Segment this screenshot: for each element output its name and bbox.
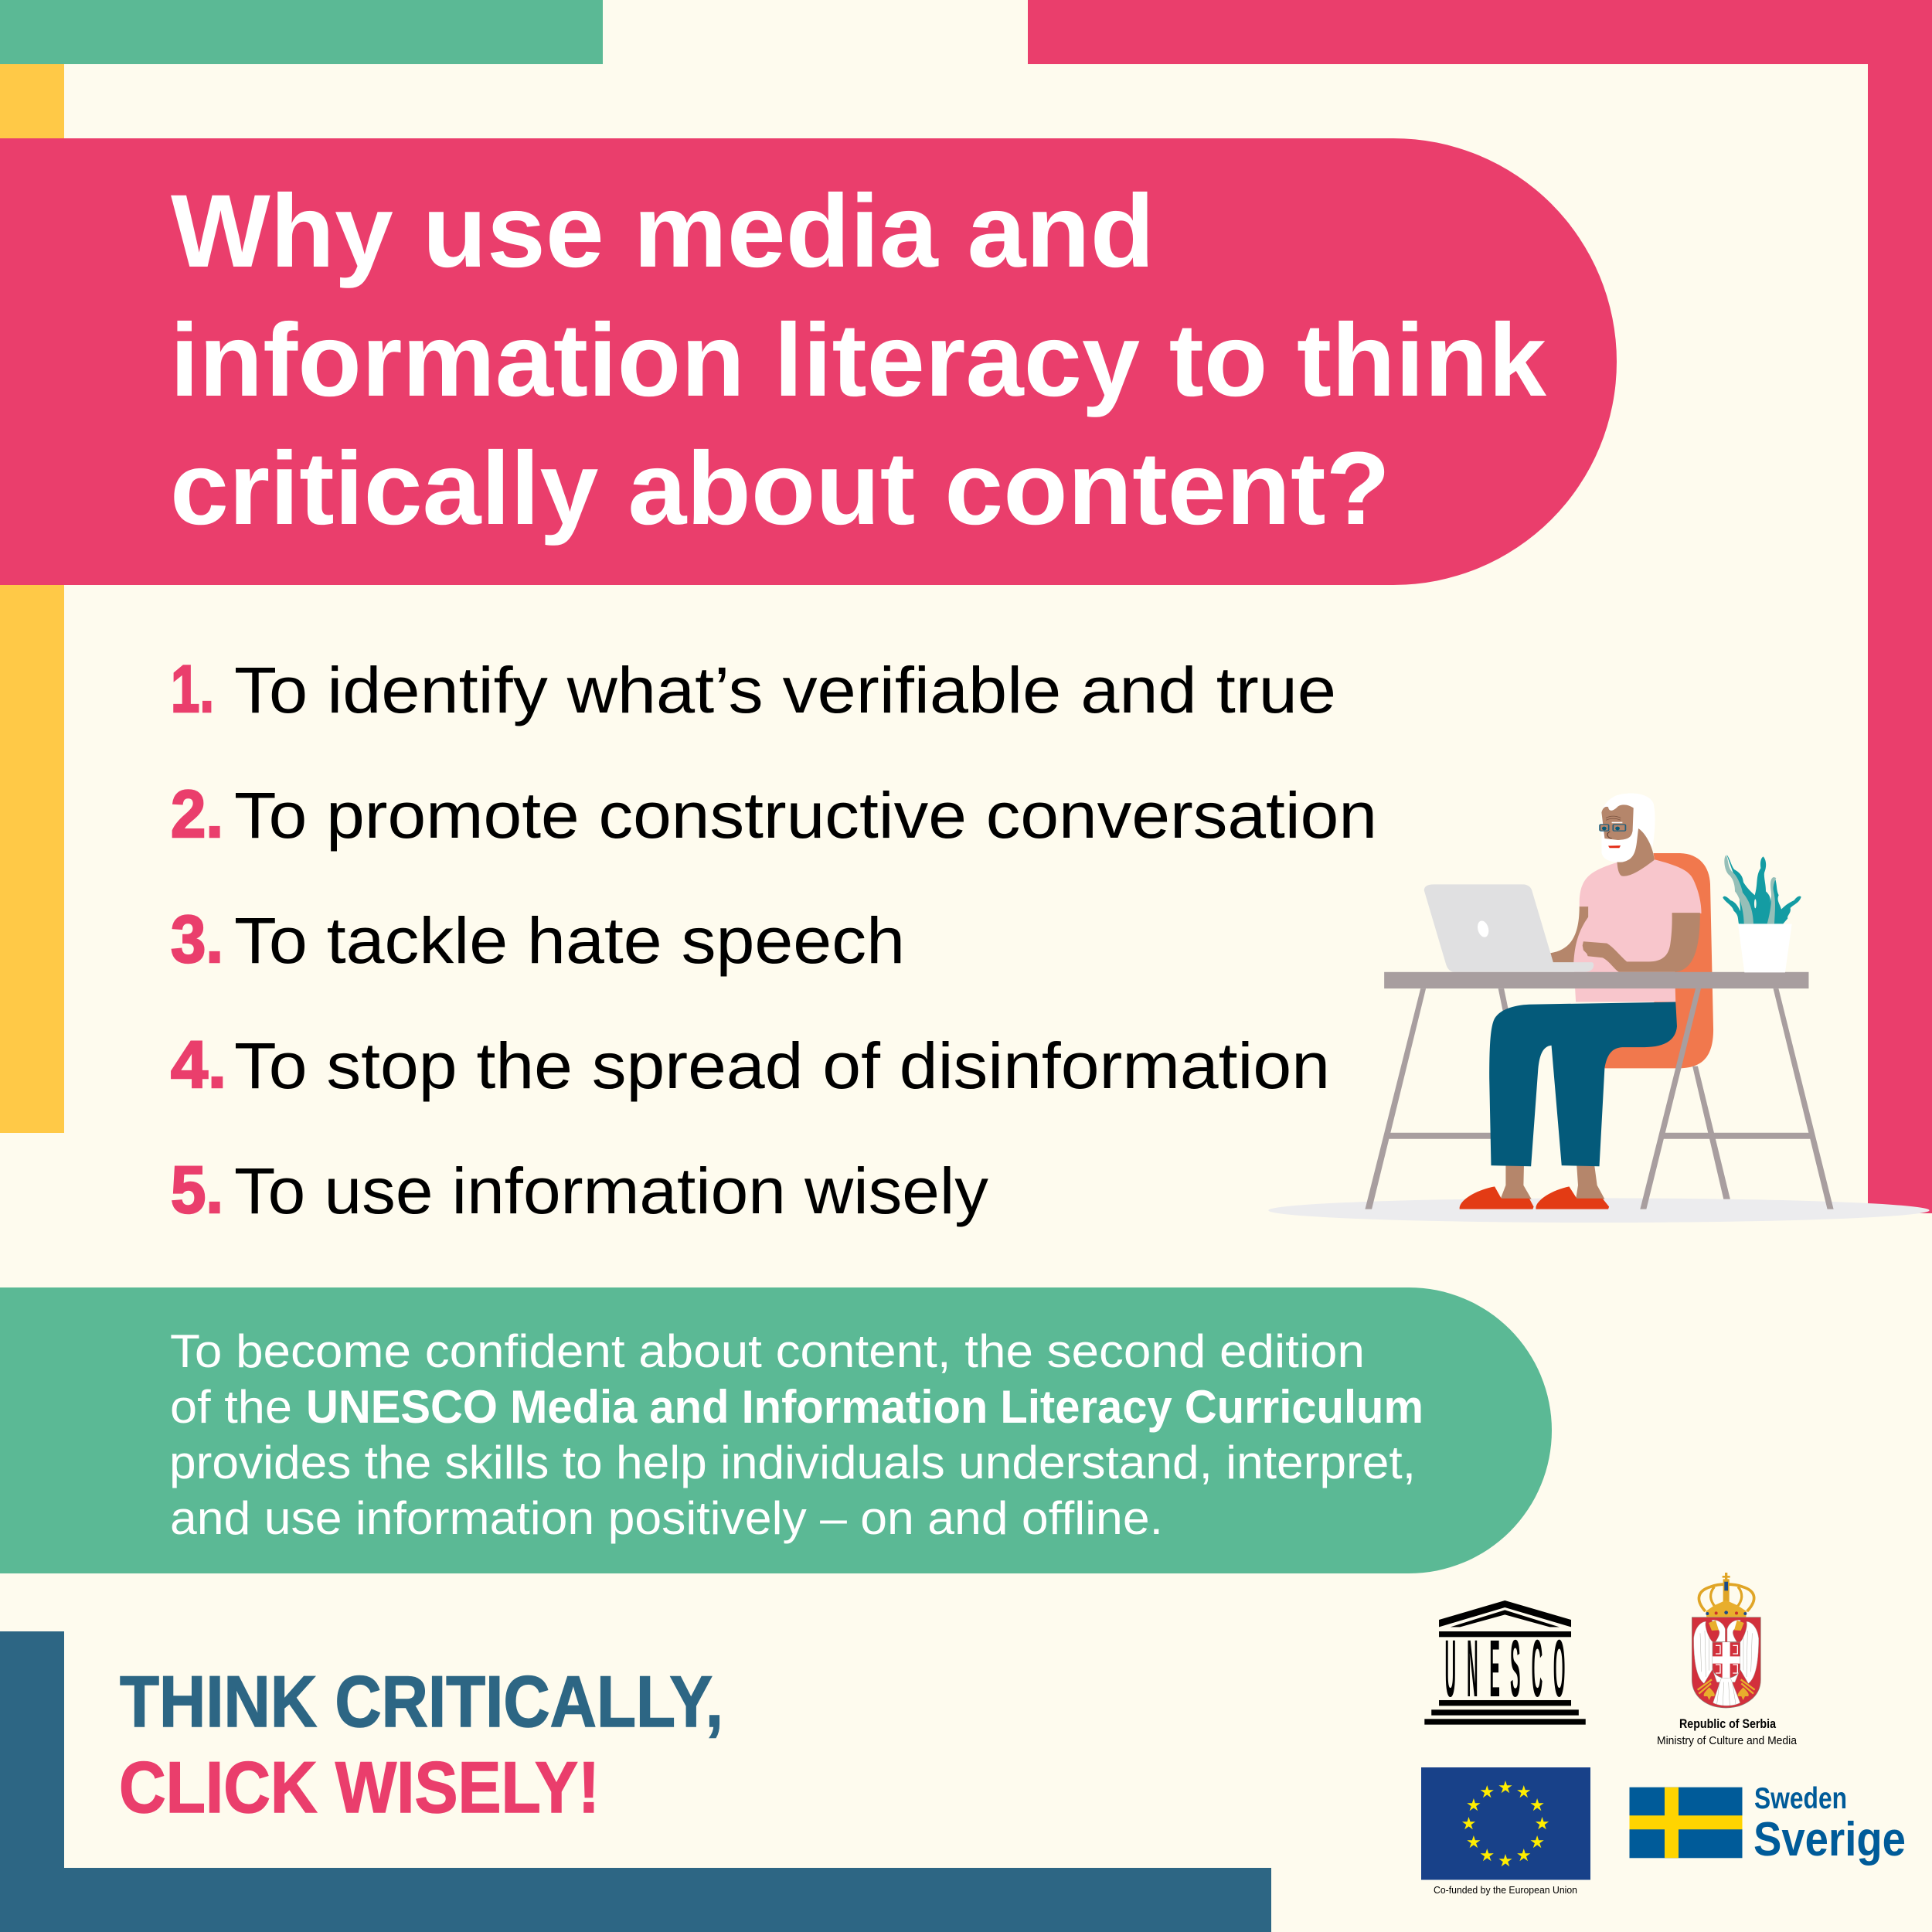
- item 4: 4.: [171, 1028, 226, 1102]
- item 5: 5.: [171, 1153, 223, 1227]
- slogan: THINK CRITICALLY,: [120, 1661, 723, 1742]
- slippers: [1460, 1186, 1609, 1209]
- EU caption: Co-funded by the European Union: [1434, 1884, 1577, 1896]
- item 2: To promote constructive conversation: [234, 779, 1377, 852]
- frame: blue bottom-left bar: [0, 1631, 1271, 1932]
- wordmark: O: [1553, 1624, 1565, 1715]
- EU flag: [1421, 1767, 1590, 1879]
- chair: [1604, 853, 1713, 1068]
- leaves: [1723, 855, 1801, 923]
- shield: [1692, 1617, 1760, 1708]
- far arm: [1550, 906, 1588, 964]
- title: information literacy to think: [170, 303, 1546, 418]
- title: Why use media and: [171, 174, 1155, 289]
- wordmark: U: [1445, 1624, 1456, 1715]
- item 2: 2.: [171, 777, 223, 852]
- item 3: To tackle hate speech: [234, 904, 905, 977]
- logo: Republic of Serbia: [1657, 1573, 1798, 1747]
- back table legs: [1498, 988, 1730, 1199]
- small shield with cross: [1713, 1642, 1740, 1679]
- callout text: [169, 1325, 1423, 1544]
- table front legs and crossbars: [1365, 988, 1834, 1209]
- table top: [1384, 972, 1808, 988]
- callout panel: [0, 1287, 1552, 1573]
- wordmark: S: [1510, 1624, 1520, 1715]
- neck: [1617, 828, 1655, 876]
- green panel shape: [0, 1287, 1552, 1573]
- wordmark: N: [1467, 1624, 1478, 1715]
- Serbia caption: [1657, 1717, 1798, 1747]
- illustration: potted plant: [1723, 855, 1801, 972]
- glasses and mouth: [1600, 816, 1625, 848]
- near arm: [1583, 913, 1700, 972]
- frame: green top bar: [0, 0, 603, 64]
- logo: European Union: [1421, 1767, 1590, 1896]
- laptop logo: [1476, 920, 1490, 937]
- coat of arms: [1692, 1573, 1760, 1708]
- eagle: [1694, 1620, 1759, 1706]
- wordmark: E: [1490, 1624, 1500, 1715]
- title: [170, 174, 1546, 546]
- frame: yellow left bar: [0, 64, 64, 1133]
- wordmark: C: [1532, 1624, 1543, 1715]
- Sweden wordmark: Sweden: [1754, 1782, 1847, 1815]
- shirt: [1573, 859, 1702, 1002]
- item 4: To stop the spread of disinformation: [234, 1029, 1330, 1102]
- pot: [1738, 924, 1792, 972]
- temple: [1424, 1600, 1586, 1725]
- logo: Sweden: [1629, 1782, 1906, 1866]
- beaks: [1709, 1621, 1744, 1631]
- callout text: provides the skills to help individuals understand, interpret,: [169, 1437, 1416, 1488]
- callout text: and use information positively – on and offline.: [170, 1492, 1163, 1544]
- laptop: [1424, 884, 1594, 972]
- wordmark: [1445, 1624, 1565, 1715]
- face: [1601, 804, 1634, 840]
- talons and lilies: [1698, 1679, 1755, 1694]
- item 5: To use information wisely: [234, 1155, 988, 1227]
- hair and beard: [1601, 794, 1655, 862]
- Serbia caption: Republic of Serbia: [1679, 1717, 1777, 1731]
- slogan: [119, 1661, 723, 1828]
- Sweden wordmark: [1753, 1782, 1906, 1866]
- crown: [1699, 1573, 1754, 1617]
- title banner: [0, 138, 1617, 585]
- trousers: [1489, 1002, 1677, 1166]
- slogan: CLICK WISELY!: [119, 1747, 600, 1828]
- frame: pink top and right bar: [1028, 0, 1932, 1213]
- numbered list: [171, 652, 1377, 1227]
- item 3: 3.: [171, 903, 223, 977]
- banner shape: [0, 138, 1617, 585]
- callout text: of the: [170, 1381, 292, 1433]
- Serbia caption: Ministry of Culture and Media: [1657, 1734, 1798, 1747]
- flag cross: [1629, 1787, 1742, 1858]
- floor shadow: [1268, 1198, 1930, 1223]
- Swedish flag: [1629, 1787, 1742, 1858]
- illustration: man at desk: [1268, 794, 1930, 1223]
- calves: [1501, 1165, 1604, 1199]
- logo: UNESCO: [1424, 1600, 1586, 1725]
- title: critically about content?: [170, 431, 1390, 546]
- item 1: To identify what’s verifiable and true: [234, 654, 1336, 726]
- EU stars: [1462, 1781, 1549, 1866]
- callout text: UNESCO Media and Information Literacy Curriculum: [306, 1381, 1423, 1433]
- callout text: To become confident about content, the second edition: [170, 1325, 1365, 1377]
- item 1: 1.: [171, 652, 214, 726]
- Sweden wordmark: Sverige: [1753, 1813, 1906, 1866]
